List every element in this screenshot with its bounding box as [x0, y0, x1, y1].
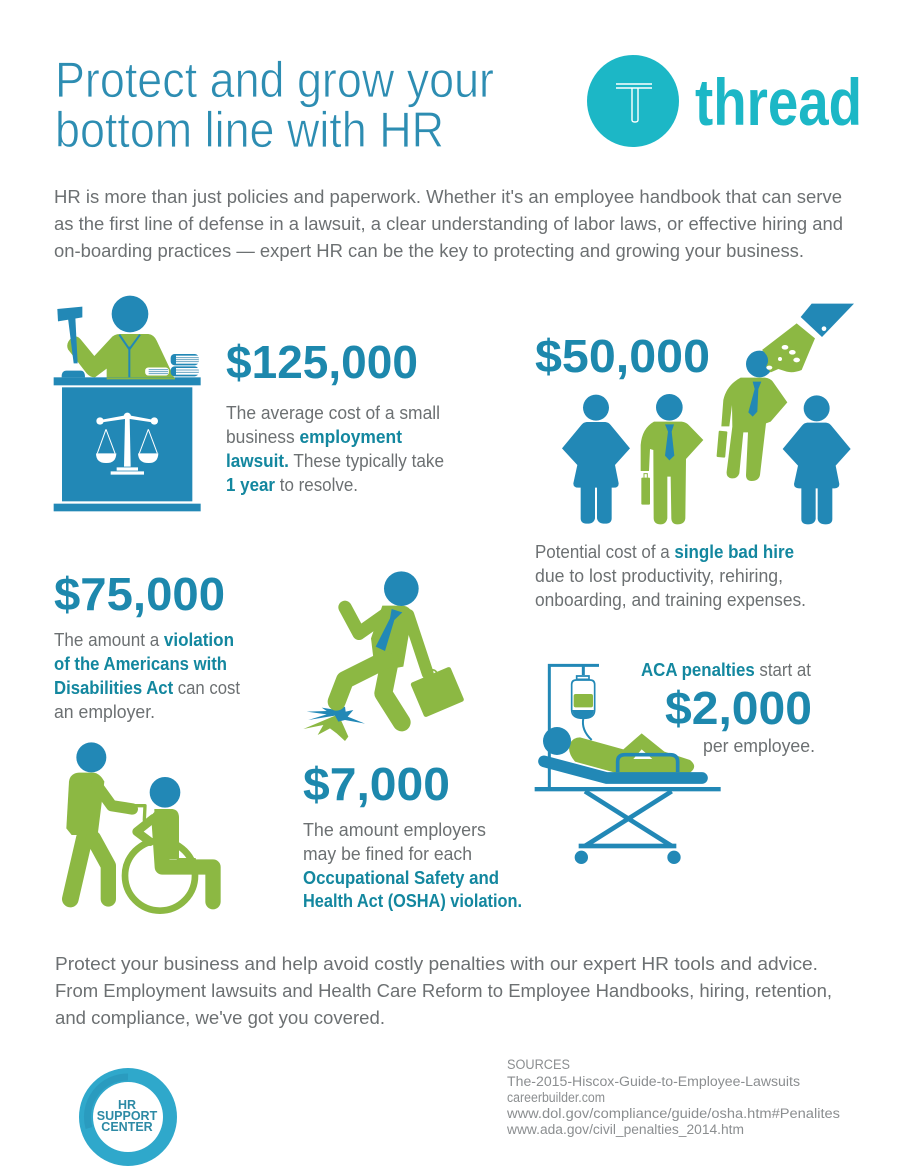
panel: OSHA violation: [303, 571, 522, 911]
man with briefcase: [641, 394, 703, 524]
intro text: [54, 187, 843, 261]
description: OSHA fine: may be fined for each: [303, 844, 472, 864]
stat: $7,000: $7,000: [303, 758, 450, 810]
description: OSHA fine: Health Act (OSHA) violation.: [303, 891, 522, 911]
description: OSHA fine: Occupational Safety and: [303, 868, 499, 888]
woman right: [783, 395, 851, 524]
panel: employment lawsuit: [54, 296, 444, 511]
description: bad hire cost: Potential cost of a single bad hire: [535, 542, 794, 562]
intro text: on-boarding practices — expert HR can be the key to protecting and growing your business.: [54, 241, 804, 261]
sources: www.dol.gov/compliance/guide/osha.htm#Penalites: [506, 1106, 840, 1121]
sources: SOURCES: [507, 1057, 570, 1072]
description: ADA cost: an employer.: [54, 702, 155, 722]
stat: $2,000: $2,000: [665, 682, 812, 734]
stat: $50,000: $50,000: [535, 330, 710, 382]
splash: [303, 715, 348, 741]
description: OSHA fine: [303, 820, 522, 911]
description: ADA cost: Disabilities Act can cost: [54, 678, 240, 698]
description: lawsuit cost: [226, 403, 444, 495]
woman left: [562, 395, 630, 524]
description: per employee: per employee.: [703, 736, 815, 756]
description: bad hire cost: due to lost productivity, rehiring,: [535, 566, 783, 586]
logo: thread: thread: [695, 65, 862, 139]
icon: team with bad hire plucked out: [562, 304, 854, 524]
logo: HR Support Center: [79, 1068, 177, 1166]
title: [55, 52, 494, 158]
pusher: [66, 773, 132, 899]
icon: man tripping: [303, 571, 465, 741]
closing text: [55, 954, 832, 1028]
icon: person pushing wheelchair: [66, 742, 213, 911]
panel: ACA penalties: [535, 660, 815, 864]
description: ADA cost: [54, 630, 240, 722]
description: OSHA fine: The amount employers: [303, 820, 486, 840]
closing text: From Employment lawsuits and Health Care Reform to Employee Handbooks, hiring, retention,: [55, 981, 832, 1001]
description: ACA lead-in: ACA penalties start at: [641, 660, 811, 680]
body: [337, 606, 428, 722]
icon: scales of justice: [96, 413, 158, 475]
sources: [506, 1057, 840, 1137]
sources: The-2015-Hiscox-Guide-to-Employee-Lawsuits: [507, 1074, 800, 1089]
logo: HR Support Center: SUPPORT: [97, 1109, 158, 1123]
intro text: HR is more than just policies and paperwork. Whether it's an employee handbook that can serve: [54, 187, 842, 207]
intro text: as the first line of defense in a lawsuit, a clear understanding of labor laws, or effective hiring and: [54, 214, 843, 234]
logo: HR Support Center: HR: [118, 1098, 136, 1112]
wheelchair rider: [125, 806, 213, 911]
closing text: Protect your business and help avoid costly penalties with our expert HR tools and advice.: [55, 954, 818, 974]
plucked man: [717, 304, 854, 481]
panel: ADA violation: [54, 568, 240, 911]
description: ADA cost: The amount a violation: [54, 630, 234, 650]
stat: $125,000: $125,000: [226, 336, 418, 388]
description: lawsuit cost: 1 year to resolve.: [226, 475, 358, 495]
panel: bad hire: [535, 304, 854, 610]
title: Protect and grow your: [55, 52, 494, 108]
description: bad hire cost: [535, 542, 806, 610]
title: bottom line with HR: [55, 102, 444, 158]
description: lawsuit cost: The average cost of a small: [226, 403, 440, 423]
description: ADA cost: of the Americans with: [54, 654, 227, 674]
closing text: and compliance, we've got you covered.: [55, 1008, 385, 1028]
icon: patient on hospital gurney: [535, 665, 721, 864]
icon: judge at bench: [54, 296, 201, 511]
logo: thread: [587, 55, 862, 147]
description: lawsuit cost: business employment: [226, 427, 402, 447]
logo: HR Support Center: CENTER: [101, 1120, 153, 1134]
description: bad hire cost: onboarding, and training expenses.: [535, 590, 806, 610]
stat: $75,000: $75,000: [54, 568, 225, 620]
description: lawsuit cost: lawsuit. These typically take: [226, 451, 444, 471]
sources: careerbuilder.com: [507, 1090, 605, 1105]
sources: www.ada.gov/civil_penalties_2014.htm: [506, 1122, 744, 1137]
